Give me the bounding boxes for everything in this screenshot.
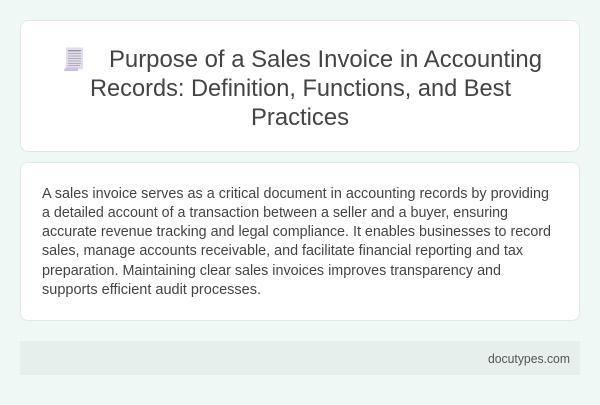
heading: title: Practices bbox=[251, 104, 349, 131]
text block: description: preparation. Maintaining clear sales invoices improves transparency and bbox=[42, 263, 501, 279]
text block: description: A sales invoice serves as a critical document in accounting records by providing bbox=[42, 186, 549, 202]
footer bar bbox=[20, 341, 580, 375]
heading: title: Purpose of a Sales Invoice in Accounting bbox=[109, 46, 542, 73]
text block: description: sales, manage accounts receivable, and facilitate financial reporting and tax bbox=[42, 243, 524, 259]
text block: description: supports efficient audit processes. bbox=[42, 282, 261, 298]
text block: description: accurate revenue tracking and legal compliance. It enables businesses to record bbox=[42, 224, 551, 240]
text block: description: a detailed account of a transaction between a seller and a buyer, ensuring bbox=[42, 205, 508, 221]
footer: source credit: docutypes.com bbox=[488, 352, 570, 366]
panel: title card bbox=[20, 20, 580, 152]
panel: description card bbox=[20, 162, 580, 321]
heading: title: Records: Definition, Functions, and Best bbox=[90, 75, 511, 102]
